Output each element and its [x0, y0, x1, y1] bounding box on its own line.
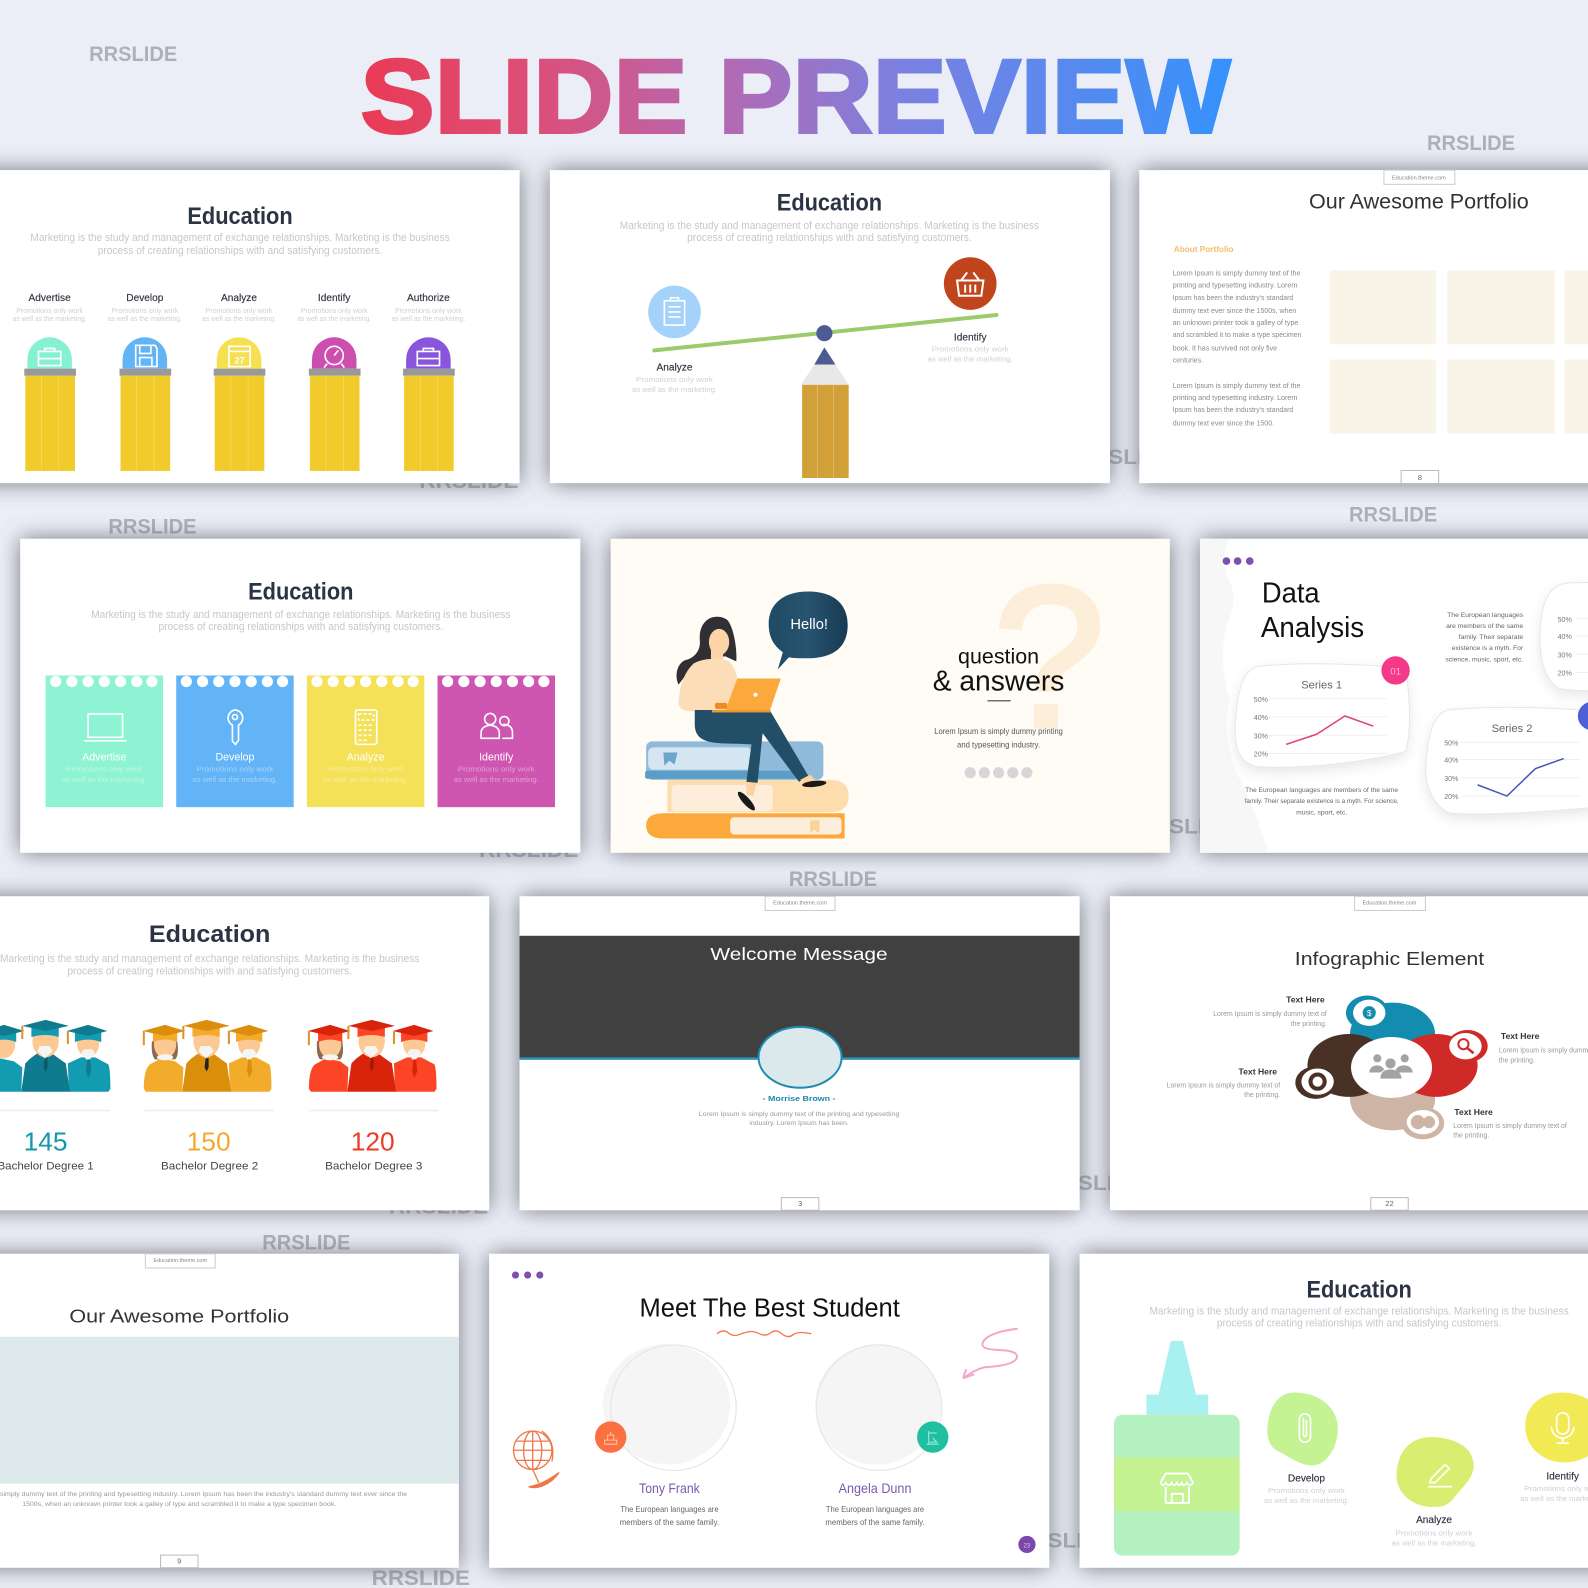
- accent line: [520, 1057, 1080, 1060]
- card: Identify: as well as the marketing.: [454, 775, 539, 784]
- text: industry. Lorem Ipsum has been.: [749, 1121, 849, 1127]
- page badge: 23: [1024, 1543, 1031, 1549]
- slide 5: question and answers: [611, 539, 1170, 853]
- icon: basket: [944, 257, 997, 310]
- intro text: process of creating relationships with and satisfying customers.: [1217, 1318, 1501, 1330]
- stat: 145: [0, 1126, 94, 1173]
- label: Analyze: Analyze: [1416, 1515, 1452, 1526]
- slide 12: education bottle: [1080, 1254, 1588, 1568]
- stat: 150: 150: [187, 1126, 231, 1156]
- label: Identify: as well as the marketing.: [928, 355, 1013, 364]
- portrait right: [815, 1344, 942, 1471]
- callout: left: [1167, 1067, 1280, 1099]
- column: Advertise: [13, 293, 87, 471]
- chart card: Series 1: [1235, 664, 1410, 767]
- infographic cluster: $: [1367, 1009, 1372, 1018]
- chart card: Series 2: 20%: [1444, 793, 1459, 801]
- intro text: Marketing is the study and management of exchange relationships. Marketing is the business: [620, 220, 1039, 232]
- name: Tony Frank: Tony Frank: [639, 1481, 700, 1496]
- heading: Infographic Element: [1295, 949, 1484, 969]
- social dots: [1223, 557, 1254, 565]
- stat: 150: Bachelor Degree 2: [161, 1161, 258, 1173]
- scribble arrow: [963, 1329, 1018, 1378]
- icon: orange badge: [595, 1421, 626, 1453]
- intro text: [1149, 1306, 1569, 1330]
- callout: left: the printing.: [1244, 1092, 1280, 1099]
- site tag: Education.theme.com: [773, 900, 827, 906]
- column: Identify: Identify: [318, 293, 351, 304]
- label: Identify: Promotions only work: [932, 344, 1009, 353]
- pivot dot: [816, 325, 832, 341]
- description: and typesetting industry.: [957, 739, 1040, 749]
- name: - Morrise Brown -: [763, 1094, 836, 1103]
- slide 6: data analysis: [1200, 539, 1588, 853]
- blob: Analyze: [1397, 1437, 1474, 1507]
- page number: [781, 1198, 819, 1210]
- intro text: [30, 232, 450, 257]
- card: Analyze: as well as the marketing.: [323, 775, 408, 784]
- label: Analyze: Analyze: [657, 363, 693, 374]
- slide 8: welcome message: [520, 896, 1080, 1210]
- pencil: [801, 347, 849, 478]
- heading: Our Awesome Portfolio: [1309, 190, 1529, 214]
- page number: [1371, 1198, 1408, 1210]
- icon: clipboard: [648, 286, 701, 338]
- bio right: The European languages are: [826, 1504, 924, 1514]
- slide 1: education pencils: [0, 170, 520, 483]
- intro text: Marketing is the study and management of exchange relationships. Marketing is the business: [30, 232, 450, 244]
- blob: Identify: [1525, 1392, 1588, 1462]
- heading: [1261, 578, 1364, 644]
- label: Analyze: Promotions only work: [636, 375, 713, 384]
- heading: Education: [1306, 1276, 1412, 1303]
- callout: right: the printing.: [1499, 1057, 1535, 1064]
- card: Analyze: Promotions only work: [327, 765, 404, 774]
- callout: right: [1499, 1031, 1588, 1064]
- card: Analyze: Analyze: [347, 752, 385, 764]
- watermarks: RRSLIDE: [108, 515, 196, 539]
- brush texture: [1200, 539, 1268, 853]
- subheading: About Portfolio: [1174, 245, 1234, 254]
- watermarks: RRSLIDE: [479, 838, 578, 862]
- callout: bottom right: Text Here: [1454, 1107, 1493, 1117]
- body text: Ipsum has been the industry's standard: [1173, 293, 1293, 302]
- side text: are members of the same: [1446, 623, 1523, 630]
- heading: [933, 644, 1064, 698]
- label: Analyze: Promotions only work: [1396, 1528, 1473, 1537]
- description: family. Their separate existence is a myth. For science,: [1245, 798, 1399, 805]
- text: simply dummy text of the printing and typesetting industry. Lorem Ipsum has been the industry's standard dummy text ever since the: [0, 1492, 408, 1498]
- chart card: top right: [1540, 583, 1588, 691]
- site tag: [1384, 170, 1455, 184]
- big question mark: ?: [993, 545, 1105, 769]
- seesaw beam: [654, 315, 997, 350]
- heading: Analysis: [1261, 612, 1364, 644]
- badge 01: [1381, 656, 1410, 685]
- label: Develop: [1264, 1474, 1349, 1505]
- intro text: [91, 609, 511, 633]
- description: The European languages are members of the same: [1245, 787, 1398, 794]
- slide 3: portfolio with text: [1139, 170, 1588, 484]
- callout: top left: [1213, 995, 1327, 1028]
- badge 02: [1578, 702, 1588, 730]
- card: Identify: Promotions only work: [458, 765, 535, 774]
- card: Advertise: Promotions only work: [66, 765, 143, 774]
- label: Analyze: as well as the marketing.: [632, 385, 717, 394]
- bio left: members of the same family.: [620, 1517, 719, 1527]
- column: Develop: as well as the marketing.: [108, 314, 182, 323]
- body text: an unknown printer took a galley of type: [1173, 318, 1298, 327]
- heading: Education: [187, 203, 293, 230]
- intro text: process of creating relationships with and satisfying customers.: [67, 965, 352, 977]
- page number: [161, 1555, 198, 1568]
- graduates: red: [308, 1020, 436, 1092]
- card: Advertise: [46, 676, 163, 807]
- heading: question: [958, 644, 1039, 668]
- column: Identify: Promotions only work: [301, 306, 368, 315]
- body text: dummy text ever since the 1500.: [1173, 418, 1274, 427]
- body text: Ipsum has been the industry's standard: [1173, 405, 1293, 414]
- column: Authorize: Promotions only work: [395, 306, 462, 315]
- watermarks: RRSLIDE: [1045, 1171, 1144, 1195]
- label: Develop: Develop: [1288, 1474, 1325, 1485]
- watermarks: RRSLIDE: [1015, 1528, 1114, 1552]
- site tag: Education.theme.com: [153, 1258, 208, 1264]
- card: Develop: as well as the marketing.: [192, 775, 277, 784]
- intro text: process of creating relationships with and satisfying customers.: [687, 232, 972, 244]
- name: Angela Dunn: Angela Dunn: [839, 1481, 911, 1496]
- portrait left: [603, 1344, 736, 1471]
- watermarks: RRSLIDE: [262, 1231, 350, 1255]
- chart card: Series 2: 30%: [1444, 775, 1459, 783]
- chart card: Series 2: 40%: [1444, 757, 1459, 765]
- card: Develop: [176, 676, 294, 807]
- column: Authorize: Authorize: [407, 293, 450, 304]
- heading: Data: [1262, 578, 1320, 610]
- column: Analyze: Promotions only work: [206, 306, 273, 315]
- page badge: [1018, 1536, 1036, 1553]
- speech bubble: Hello!: [790, 617, 828, 633]
- card: Advertise: as well as the marketing.: [62, 775, 147, 784]
- heading: Our Awesome Portfolio: [69, 1307, 289, 1327]
- body text: centuries.: [1173, 356, 1203, 365]
- column: Identify: [297, 293, 371, 471]
- heading: Education: [777, 190, 882, 217]
- description: music, sport, etc.: [1296, 809, 1347, 816]
- callout: bottom right: [1453, 1107, 1567, 1139]
- body text: dummy text ever since the 1500s, when: [1173, 306, 1296, 315]
- column: Analyze: [202, 293, 276, 471]
- chart card: top right: 40%: [1558, 633, 1572, 641]
- description: Lorem Ipsum is simply dummy printing: [934, 726, 1063, 736]
- glue bottle: [1114, 1341, 1240, 1556]
- intro text: [0, 953, 420, 977]
- body text: printing and typesetting industry. Lorem: [1173, 393, 1297, 402]
- intro text: Marketing is the study and management of exchange relationships. Marketing is the business: [91, 609, 511, 621]
- chart card: Series 1: 50%: [1254, 696, 1269, 704]
- label: Identify: [1520, 1472, 1588, 1503]
- stat: 150: [161, 1126, 258, 1173]
- watermarks: RRSLIDE: [389, 1194, 488, 1218]
- chart card: Series 2: Series 2: [1492, 723, 1532, 735]
- image placeholders: [1330, 270, 1588, 433]
- label: Analyze: [1392, 1515, 1477, 1547]
- watermarks: RRSLIDE: [789, 867, 877, 891]
- image band: [0, 1337, 459, 1484]
- label: Analyze: [632, 363, 717, 394]
- site tag: Education.theme.com: [1392, 175, 1446, 181]
- intro text: process of creating relationships with and satisfying customers.: [98, 245, 382, 257]
- callout: bottom right: the printing.: [1453, 1132, 1489, 1139]
- text: Lorem Ipsum is simply dummy text of the printing and typesetting: [699, 1112, 899, 1118]
- column: Analyze: 27: [234, 356, 245, 366]
- column: Advertise: as well as the marketing.: [13, 314, 87, 323]
- bio right: members of the same family.: [825, 1517, 925, 1527]
- site tag: [765, 896, 835, 910]
- bio right: [825, 1504, 925, 1527]
- text: 1500s, when an unknown printer took a galley of type and scrambled it to make a type specimen book.: [22, 1502, 337, 1508]
- label: Identify: [928, 332, 1013, 364]
- body text: book. It has survived not only five: [1173, 343, 1277, 352]
- dark banner: [520, 936, 1080, 1058]
- watermarks: RRSLIDE: [1349, 503, 1437, 527]
- card: Identify: [438, 676, 555, 807]
- column: Identify: as well as the marketing.: [297, 314, 371, 323]
- column: Develop: Develop: [126, 293, 164, 304]
- page number: 22: [1385, 1199, 1394, 1208]
- watermarks: RRSLIDE: [1427, 131, 1515, 155]
- side text: science, music, sport, etc.: [1445, 656, 1523, 663]
- card: Develop: Promotions only work: [196, 765, 274, 774]
- column: Advertise: Promotions only work: [16, 306, 83, 315]
- site tag: [1355, 896, 1425, 910]
- card: Identify: Identify: [479, 752, 514, 764]
- column: Authorize: [391, 293, 465, 471]
- portrait ellipse: [759, 1027, 842, 1088]
- icon: teal badge: [917, 1421, 948, 1453]
- card: Advertise: Advertise: [82, 752, 127, 764]
- callout: top left: Text Here: [1286, 995, 1325, 1005]
- chart card: top right: 20%: [1558, 670, 1572, 678]
- body text: Lorem Ipsum is simply dummy text of the: [1173, 381, 1300, 390]
- intro text: Marketing is the study and management of exchange relationships. Marketing is the business: [0, 953, 420, 965]
- banner heading: Welcome Message: [710, 944, 888, 964]
- card: Develop: Develop: [215, 752, 255, 764]
- side text: family. Their separate: [1459, 634, 1523, 641]
- site tag: Education.theme.com: [1363, 900, 1417, 906]
- slide 2: balance on pencil: [550, 170, 1110, 483]
- page number: 3: [798, 1199, 802, 1208]
- column: Analyze: Analyze: [221, 293, 257, 304]
- callout: left: Text Here: [1239, 1067, 1277, 1077]
- intro text: [620, 220, 1039, 244]
- label: Identify: Identify: [1546, 1472, 1580, 1483]
- label: Analyze: as well as the marketing.: [1392, 1538, 1477, 1547]
- stat: 145: Bachelor Degree 1: [0, 1161, 94, 1173]
- squiggle: [717, 1331, 811, 1337]
- side text: The European languages: [1447, 612, 1524, 619]
- description: [1245, 787, 1399, 816]
- text: [0, 1492, 408, 1508]
- stat: 120: 120: [351, 1126, 395, 1156]
- speech bubble: [769, 591, 848, 669]
- heading: & answers: [933, 666, 1064, 698]
- stat: 120: Bachelor Degree 3: [325, 1161, 422, 1173]
- social icons: [965, 767, 1033, 778]
- watermarks: RRSLIDE: [1076, 445, 1175, 469]
- body text: Lorem Ipsum is simply dummy text of the: [1173, 268, 1300, 277]
- heading: Meet The Best Student: [640, 1293, 900, 1323]
- body text: and scrambled it to make a type specimen: [1173, 330, 1301, 339]
- chart card: top right: 50%: [1558, 616, 1572, 624]
- slide 9: infographic element: [1110, 896, 1588, 1210]
- separators: [0, 1109, 439, 1111]
- blob: Develop: [1267, 1393, 1338, 1465]
- column: Advertise: Advertise: [29, 293, 71, 304]
- chart card: Series 1: 20%: [1254, 751, 1269, 759]
- intro text: process of creating relationships with and satisfying customers.: [158, 621, 443, 633]
- chart card: Series 2: 50%: [1444, 739, 1459, 747]
- site tag: [145, 1254, 215, 1268]
- page number: 9: [177, 1557, 181, 1566]
- graduates: orange: [143, 1020, 271, 1092]
- callout: left: Lorem Ipsum is simply dummy text of: [1167, 1083, 1280, 1090]
- callout: bottom right: Lorem Ipsum is simply dummy text of: [1453, 1123, 1567, 1130]
- chart card: Series 2: [1426, 707, 1588, 814]
- divider: [987, 700, 1011, 702]
- chart card: Series 1: Series 1: [1301, 680, 1342, 692]
- slide 10: portfolio band: [0, 1254, 459, 1568]
- label: Develop: as well as the marketing.: [1264, 1496, 1349, 1505]
- infographic cluster: [1295, 996, 1488, 1139]
- stat: 145: 145: [24, 1126, 68, 1156]
- callout: top left: Lorem Ipsum is simply dummy text of: [1213, 1011, 1327, 1018]
- heading: Education: [149, 921, 270, 948]
- callout: right: Text Here: [1501, 1031, 1540, 1041]
- column: Develop: Promotions only work: [111, 306, 178, 315]
- description: [934, 726, 1063, 749]
- graduates: teal: [0, 1020, 110, 1092]
- main title: SLIDE PREVIEW: [361, 39, 1231, 156]
- callout: top left: the printing.: [1291, 1021, 1327, 1028]
- label: Develop: Promotions only work: [1268, 1486, 1345, 1495]
- side text: existence is a myth. For: [1452, 645, 1524, 652]
- badge 01: 01: [1390, 666, 1401, 677]
- column: Authorize: as well as the marketing.: [391, 314, 465, 323]
- bio left: The European languages are: [620, 1504, 719, 1514]
- icon: globe: [513, 1431, 559, 1488]
- text: [699, 1112, 899, 1127]
- slide 4: education note cards: [20, 539, 580, 853]
- illustration: books and student: [645, 617, 849, 839]
- side text: [1445, 612, 1524, 663]
- card: Analyze: [307, 676, 424, 807]
- bio left: [620, 1504, 719, 1527]
- watermarks: RRSLIDE: [89, 42, 177, 66]
- social dots: [512, 1272, 543, 1279]
- page number: 8: [1418, 473, 1422, 482]
- watermarks: RRSLIDE: [1136, 814, 1236, 838]
- column: Develop: [108, 293, 182, 471]
- slide 7: bachelor degrees: [0, 896, 489, 1210]
- stat: 120: [325, 1126, 422, 1173]
- watermarks: RRSLIDE: [419, 469, 519, 493]
- chart card: top right: 30%: [1558, 651, 1572, 659]
- label: Identify: Identify: [954, 332, 987, 343]
- slide 11: meet the best student: [489, 1254, 1049, 1568]
- page number: [1401, 470, 1439, 484]
- body text: [1173, 268, 1301, 427]
- chart card: Series 1: 40%: [1254, 714, 1269, 722]
- body text: printing and typesetting industry. Lorem: [1173, 281, 1297, 290]
- chart card: Series 1: 30%: [1254, 732, 1269, 740]
- column: Analyze: as well as the marketing.: [202, 314, 276, 323]
- heading: Education: [248, 579, 353, 606]
